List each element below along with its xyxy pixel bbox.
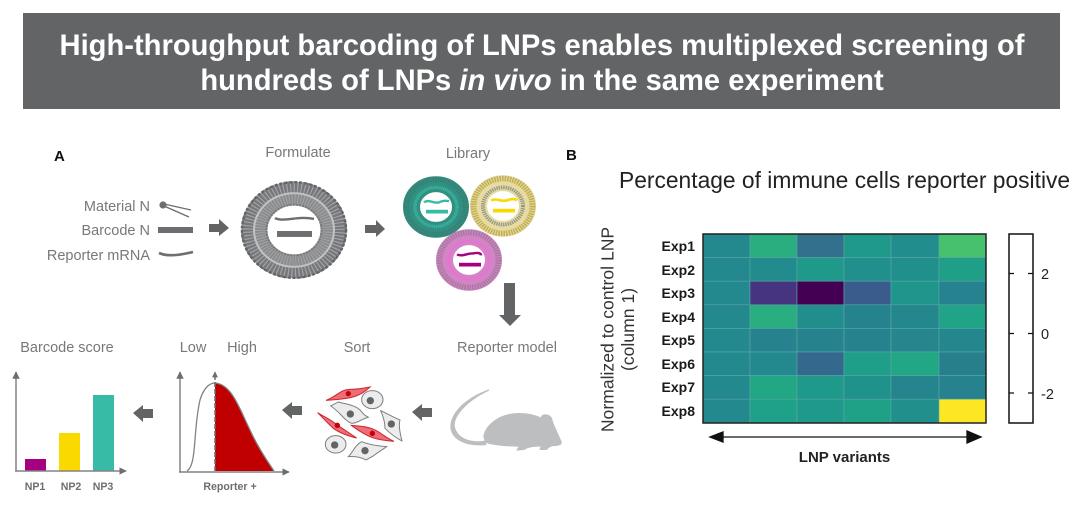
- icon: mouse: [450, 389, 562, 451]
- colorbar legend: [1009, 234, 1054, 423]
- label: Sort: Sort: [344, 340, 370, 356]
- heatmap grid: [703, 234, 986, 423]
- arrow: reporter model to sort: [412, 404, 432, 421]
- chart: barcode score bars: NP2: [61, 481, 81, 493]
- label: Reporter model: Reporter model: [457, 340, 557, 356]
- colorbar legend: 2: [1041, 267, 1049, 283]
- icon: sorted cells: [318, 387, 402, 460]
- arrow: library to reporter model: [499, 283, 521, 326]
- icon: teal nanoparticle: [406, 180, 466, 234]
- panel letter A: A: [54, 148, 65, 165]
- row labels: Exp8: [662, 403, 695, 419]
- row labels: Exp1: [662, 238, 695, 254]
- row labels: Exp5: [662, 332, 695, 348]
- chart: reporter histogram: Reporter +: [203, 481, 257, 493]
- y axis label: (column 1): [618, 288, 638, 371]
- title banner: [23, 13, 1060, 109]
- arrow: histogram to barcode score: [133, 405, 153, 422]
- icon: grey lipid nanoparticle: [242, 182, 346, 278]
- y axis label: [598, 227, 638, 432]
- row labels: [662, 238, 695, 419]
- row labels: Exp3: [662, 285, 695, 301]
- y axis label: Normalized to control LNP: [598, 227, 618, 432]
- chart: barcode score bars: NP1: [25, 481, 45, 493]
- input list: [47, 199, 193, 264]
- chart: barcode score bars: [15, 372, 126, 493]
- heatmap title: Percentage of immune cells reporter positive: [619, 167, 1070, 193]
- colorbar legend: 0: [1041, 327, 1049, 343]
- title banner: High-throughput barcoding of LNPs enables multiplexed screening of: [60, 30, 1025, 62]
- title banner: hundreds of LNPs in vivo in the same experiment: [200, 65, 884, 97]
- panel B: heatmap: [566, 147, 1070, 466]
- chart: barcode score bars: NP3: [93, 481, 113, 493]
- row labels: Exp2: [662, 262, 695, 278]
- row labels: Exp6: [662, 356, 695, 372]
- panel A: workflow: [15, 145, 562, 493]
- label: High: High: [227, 340, 257, 356]
- label: Barcode score: Barcode score: [20, 340, 114, 356]
- chart: reporter histogram: [179, 372, 289, 493]
- x axis label: LNP variants: [799, 449, 890, 466]
- icon: yellow nanoparticle: [474, 179, 532, 233]
- arrow: formulate to library: [365, 220, 385, 237]
- row labels: Exp7: [662, 379, 695, 395]
- x axis double arrow: [710, 431, 981, 443]
- label: Library: Library: [446, 146, 491, 162]
- arrow: inputs to formulate: [209, 219, 229, 236]
- arrow: sort to histogram: [282, 402, 302, 419]
- colorbar legend: -2: [1041, 387, 1054, 403]
- label: Formulate: Formulate: [265, 145, 331, 161]
- input list: Barcode N: [81, 223, 150, 239]
- label: Low: Low: [180, 340, 207, 356]
- input list: Reporter mRNA: [47, 248, 150, 264]
- input list: Material N: [84, 199, 150, 215]
- panel letter B: B: [566, 147, 577, 164]
- row labels: Exp4: [662, 309, 695, 325]
- icon: magenta nanoparticle: [440, 233, 498, 287]
